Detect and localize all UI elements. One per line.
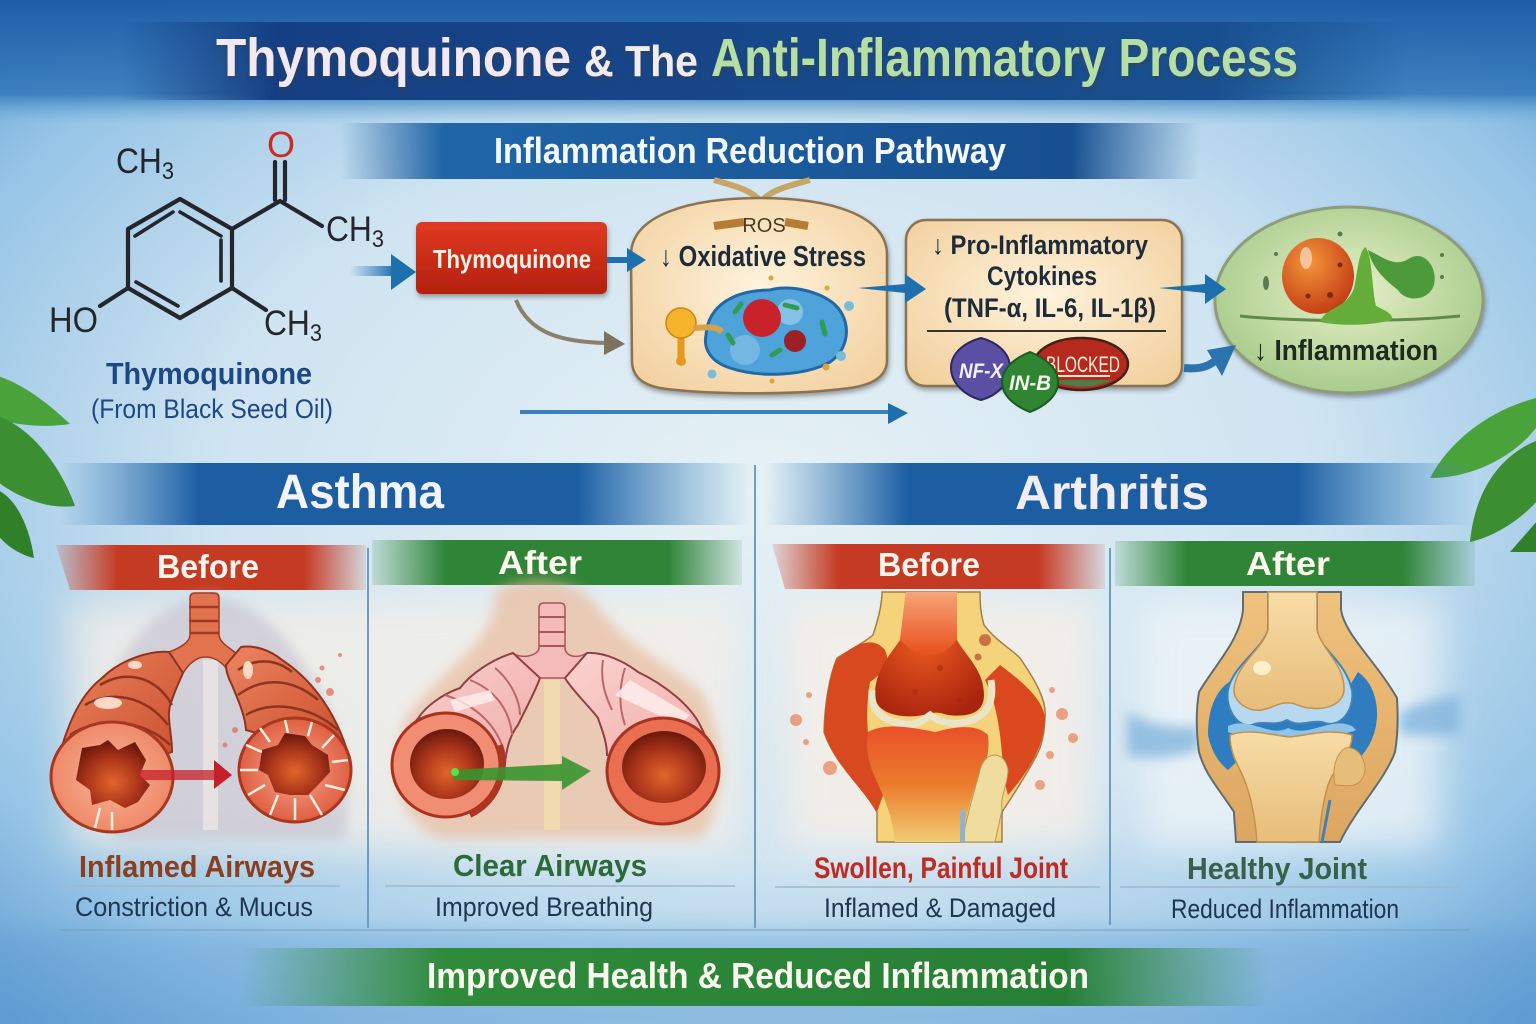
label: arthritis after — [1115, 541, 1475, 586]
long bottom arrow — [520, 403, 908, 424]
panel: cytokines — [906, 220, 1182, 412]
heading: Asthma — [60, 463, 750, 525]
thymoquinone box — [416, 222, 607, 294]
pathway heading band — [340, 123, 1200, 179]
NF-X badge: NF-X — [959, 360, 1005, 383]
illustration: clear airways — [392, 580, 721, 838]
caption: asthma before: Constriction & Mucus — [75, 892, 313, 922]
arrow: airflow — [451, 756, 591, 790]
icon: immune cell — [1240, 232, 1460, 325]
molecule: thymoquinone structure: 3 — [162, 158, 174, 185]
molecule: thymoquinone structure: 3 — [372, 226, 384, 253]
title banner — [120, 22, 1410, 100]
label: asthma after — [372, 540, 742, 585]
label: asthma after: After — [498, 544, 582, 581]
caption: asthma after: Clear Airways — [453, 848, 647, 883]
title: Thymoquinone — [216, 28, 571, 88]
illustration: swollen joint — [790, 592, 1078, 842]
arrow: molecule to thymoquinone box — [350, 254, 416, 290]
heading: Arthritis: Arthritis — [1015, 467, 1209, 520]
connector above oxidative panel — [714, 180, 810, 202]
caption: asthma after: Improved Breathing — [435, 892, 653, 922]
ros label: ROS — [742, 215, 786, 237]
cytokines text: ↓ Pro-Inflammatory — [932, 230, 1148, 260]
label: asthma before: Before — [157, 548, 259, 585]
arrow: oxidative to cytokines — [858, 274, 926, 303]
IN-B badge: IN-B — [1009, 372, 1051, 395]
molecule: thymoquinone structure: CH — [116, 142, 167, 181]
cytokines text — [932, 230, 1156, 323]
arrow: constriction — [140, 760, 232, 789]
arrow: blocked to inflammation — [1184, 345, 1236, 376]
molecule: thymoquinone structure: CH — [326, 210, 377, 249]
divider between Asthma and Arthritis — [60, 465, 1470, 930]
label: arthritis before — [772, 544, 1105, 589]
panel: oxidative stress — [631, 198, 887, 393]
footer banner: Improved Health & Reduced Inflammation — [427, 955, 1089, 996]
footer banner — [240, 948, 1270, 1006]
leaves right — [1430, 398, 1536, 552]
caption: arthritis before: Swollen, Painful Joint — [814, 852, 1068, 885]
title: & The — [584, 37, 698, 86]
thymoquinone box: Thymoquinone — [433, 244, 591, 274]
illustration: inflamed airways — [51, 593, 351, 840]
molecule: thymoquinone structure: 3 — [310, 320, 322, 347]
caption: arthritis after: Reduced Inflammation — [1171, 894, 1399, 924]
molecule: thymoquinone structure: CH — [264, 304, 315, 343]
caption: asthma before — [60, 849, 340, 922]
heading: Arthritis — [765, 463, 1475, 525]
cytokines text: (TNF-α, IL-6, IL-1β) — [944, 293, 1156, 323]
arrow: box to oxidative stress — [607, 248, 646, 272]
blocked badge: BLOCKED — [1046, 352, 1120, 377]
molecule caption: Thymoquinone — [106, 356, 312, 391]
illustration: healthy joint — [1127, 592, 1460, 842]
caption: asthma after — [385, 848, 735, 922]
pathway heading band: Inflammation Reduction Pathway — [494, 130, 1006, 171]
panel: inflammation result — [1215, 207, 1483, 393]
title: Anti-Inflammatory Process — [711, 28, 1298, 88]
blocked badge — [1034, 338, 1128, 390]
molecule caption — [91, 356, 333, 424]
ros label — [714, 215, 808, 237]
label: asthma before — [56, 545, 366, 590]
molecule: thymoquinone structure — [49, 124, 384, 347]
IN-B badge — [1002, 352, 1058, 412]
molecule: thymoquinone structure: HO — [49, 301, 98, 340]
caption: arthritis after — [1120, 851, 1460, 924]
icon: cell — [666, 276, 854, 384]
inflammation label: ↓ Inflammation — [1254, 335, 1438, 367]
molecule: thymoquinone structure: O — [267, 124, 295, 165]
label: arthritis after: After — [1246, 545, 1330, 582]
curved arrow to cell — [516, 300, 625, 355]
oxidative stress label: ↓ Oxidative Stress — [660, 241, 866, 273]
arrow: cytokines to inflammation — [1159, 274, 1226, 304]
caption: arthritis before: Inflamed & Damaged — [824, 893, 1056, 923]
cytokines text: Cytokines — [987, 261, 1097, 291]
label: arthritis before: Before — [878, 546, 980, 583]
molecule caption: (From Black Seed Oil) — [91, 394, 333, 424]
caption: asthma before: Inflamed Airways — [79, 849, 315, 884]
caption: arthritis after: Healthy Joint — [1187, 851, 1367, 886]
leaves left — [0, 376, 75, 558]
caption: arthritis before — [775, 852, 1100, 923]
NF-X badge — [951, 338, 1010, 400]
heading: Asthma: Asthma — [276, 466, 444, 519]
